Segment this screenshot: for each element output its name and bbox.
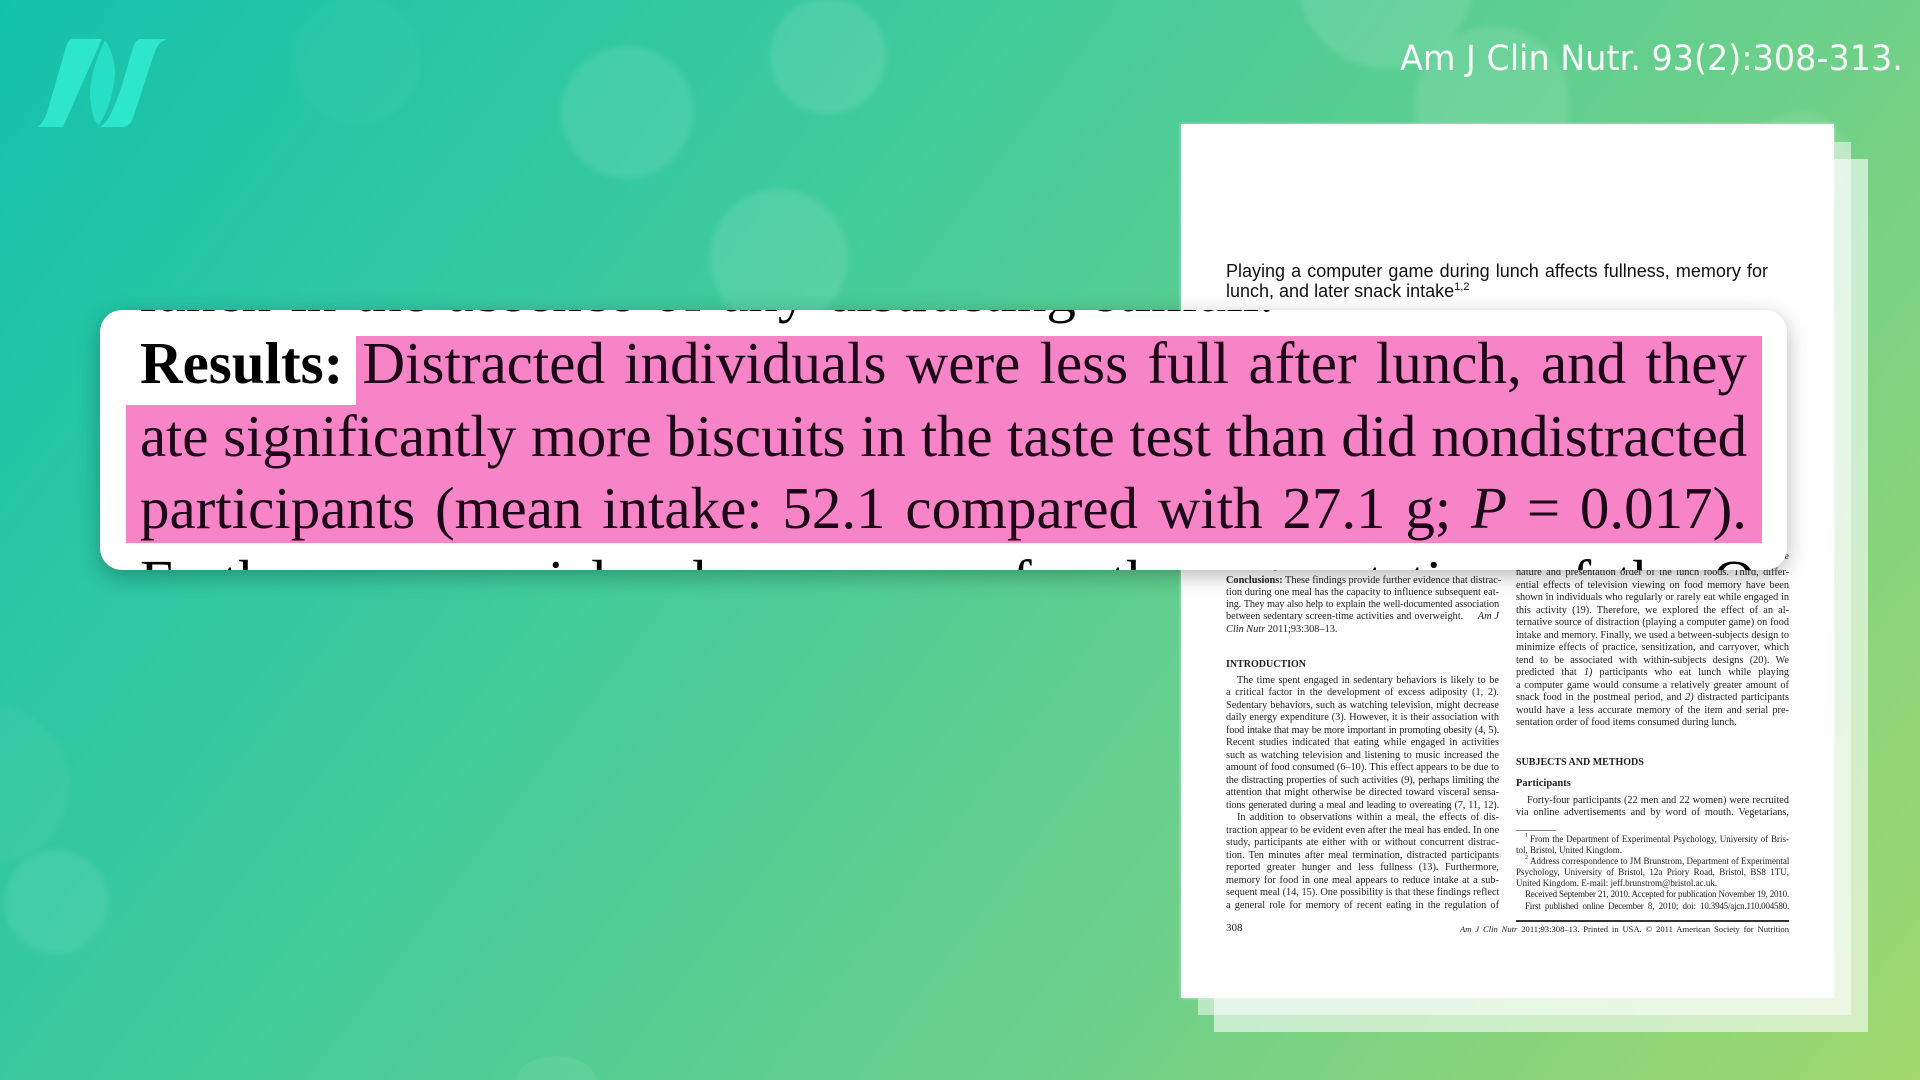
- text: results line 3: participants (mean intake: 52.1 compared with 27.1 g; P = 0.017).: [140, 475, 1747, 541]
- text: participants body: Forty-four participants (22 men and 22 women) were recruited: [1527, 794, 1789, 806]
- text: introduction body: daily energy expenditure (3). However, it is their association with: [1226, 712, 1499, 723]
- panel: back page layer 2: [1198, 142, 1851, 1015]
- footer rule: [1516, 920, 1789, 922]
- text: right column body: [1516, 567, 1789, 728]
- text: introduction body: memory for food in one meal appears to reduce intake at a sub-: [1226, 875, 1499, 886]
- text: right column body: minimize effects of practice, sensitization, and carryover, which: [1516, 642, 1789, 653]
- text: introduction body: The time spent engaged in sedentary behaviors is likely to be: [1237, 675, 1499, 686]
- text: footnotes: tol, Bristol, United Kingdom.: [1516, 845, 1622, 855]
- article title: Playing a computer game during lunch affects fullness, memory for: [1226, 261, 1768, 281]
- journal footer: Am J Clin Nutr 2011;93:308–13. Printed in USA. © 2011 American Society for Nutrition: [1460, 924, 1789, 934]
- article title: lunch, and later snack intake1,2: [1226, 281, 1469, 301]
- text: participants body: via online advertisements and by word of mouth. Vegetarians,: [1516, 807, 1789, 818]
- text: footnotes: Received September 21, 2010. Accepted for publication November 19, 2010.: [1525, 889, 1789, 899]
- text: right column body: snack food in the postmeal period, and 2) distracted participants: [1516, 692, 1789, 703]
- text: right column body: sentation order of food items consumed during lunch.: [1516, 717, 1737, 728]
- article title: [1226, 261, 1768, 301]
- icon: logo N: [37, 39, 167, 127]
- text: introduction body: a critical factor in the development of excess adiposity (1, 2).: [1226, 687, 1499, 698]
- page number: 308: [1226, 922, 1242, 934]
- text: conclusions: [1226, 575, 1501, 635]
- text: results line 2: ate significantly more biscuits in the taste test than did nondistracted: [140, 403, 1747, 469]
- text: footnotes: Address correspondence to JM Brunstrom, Department of Experimental: [1530, 856, 1789, 866]
- text: participants body: [1516, 794, 1789, 818]
- text: fragment behind card corner: the: [1776, 551, 1789, 562]
- text: introduction body: food intake that may be more important in promoting obesity (4, 5).: [1226, 725, 1499, 736]
- text: results line 1: Results: Distracted individuals were less full after lunch, and they: [140, 330, 1747, 396]
- text: introduction body: amount of food consumed (6–10). This effect appears to be due to: [1226, 762, 1499, 773]
- text: footnotes: From the Department of Experimental Psychology, University of Bris-: [1530, 834, 1789, 844]
- footnote rule: [1516, 830, 1556, 831]
- text: introduction body: Recent studies indicated that eating while engaged in activities: [1226, 737, 1499, 748]
- highlight: second and third lines: [126, 405, 1762, 543]
- text: introduction body: traction appear to be evident even after the meal has ended. In one: [1226, 825, 1499, 836]
- text: right column body: tend to be associated with within-subjects designs (20). We: [1516, 655, 1789, 666]
- text: introduction body: tions generated during a meal and leading to overeating (7, 11, 12).: [1226, 800, 1499, 811]
- text: right column body: would have a less accurate memory of the item and serial pre-: [1516, 705, 1789, 716]
- text: introduction body: In addition to observations within a meal, the effects of dis-: [1237, 812, 1499, 823]
- text: right column body: a computer game would consume a relatively greater amount of: [1516, 680, 1789, 691]
- text: conclusions: between sedentary screen-time activities and overweight. Am J: [1226, 611, 1499, 622]
- text: introduction body: Sedentary behaviors, such as watching television, might decrease: [1226, 700, 1499, 711]
- text: cut-off abstract fragment: items during lunch.: [1226, 560, 1306, 571]
- text: footnotes: 2: [1525, 855, 1528, 861]
- text: introduction body: sequent meal (14, 15). One possibility is that these findings reflect: [1226, 887, 1499, 898]
- text: right column body: shown in individuals who regularly or rarely eat while engaged in: [1516, 592, 1789, 603]
- text: introduction body: such as watching television and listening to music increased the: [1226, 750, 1499, 761]
- text: right column body: ential effects of television viewing on food memory have been: [1516, 580, 1789, 591]
- text: clipped line below: [140, 548, 1756, 570]
- highlight: first line: [356, 336, 1762, 406]
- text: introduction body: reported greater hunger and less fullness (13). Furthermore,: [1226, 862, 1499, 873]
- text: right column body: this activity (19). Therefore, we explored the effect of an al-: [1516, 605, 1789, 616]
- text: introduction body: [1226, 675, 1500, 911]
- text: conclusions: Clin Nutr 2011;93:308–13.: [1226, 624, 1337, 635]
- text: introduction body: attention that might otherwise be directed toward visceral sensa-: [1226, 787, 1499, 798]
- text: footnotes: United Kingdom. E-mail: jeff.brunstrom@bristol.ac.uk.: [1516, 878, 1717, 888]
- text: right column body: predicted that 1) participants who eat lunch while playing: [1516, 667, 1789, 678]
- text: conclusions: ing. They may also help to explain the well-documented association: [1226, 599, 1499, 610]
- text: conclusions: Conclusions: These findings provide further evidence that distrac-: [1226, 575, 1501, 586]
- panel: journal page: [1181, 124, 1834, 998]
- text: introduction body: tion. Ten minutes after meal termination, distracted participants: [1226, 850, 1499, 861]
- text: right column body: intake and memory. Finally, we used a between-subjects design to: [1516, 630, 1789, 641]
- heading: introduction: INTRODUCTION: [1226, 659, 1306, 670]
- text: right column body: ternative source of distraction (playing a computer game) on food: [1516, 617, 1789, 628]
- text: footnotes: First published online December 8, 2010; doi: 10.3945/ajcn.110.004580.: [1525, 901, 1789, 911]
- text: introduction body: a general role for memory of recent eating in the regulation of: [1226, 900, 1499, 911]
- citation: Am J Clin Nutr. 93(2):308-313.: [1400, 39, 1903, 79]
- text: right column body: nature and presentation order of the lunch foods. Third, differ-: [1516, 567, 1789, 578]
- text: footnotes: 1: [1525, 833, 1528, 839]
- text: footnotes: Psychology, University of Bristol, 12a Priory Road, Bristol, BS8 1TU,: [1516, 867, 1789, 877]
- text: footnotes: [1516, 833, 1790, 911]
- heading: subjects and methods: SUBJECTS AND METHODS: [1516, 757, 1644, 768]
- text: introduction body: the distracting properties of such activities (9), perhaps limiting the: [1226, 775, 1499, 786]
- panel: magnified results card: [100, 310, 1787, 570]
- text: conclusions: tion during one meal has the capacity to influence subsequent eat-: [1226, 587, 1499, 598]
- text: introduction body: study, participants ate either with or without concurrent distrac-: [1226, 837, 1499, 848]
- panel: back page layer 3: [1214, 159, 1868, 1032]
- heading: participants: Participants: [1516, 778, 1571, 789]
